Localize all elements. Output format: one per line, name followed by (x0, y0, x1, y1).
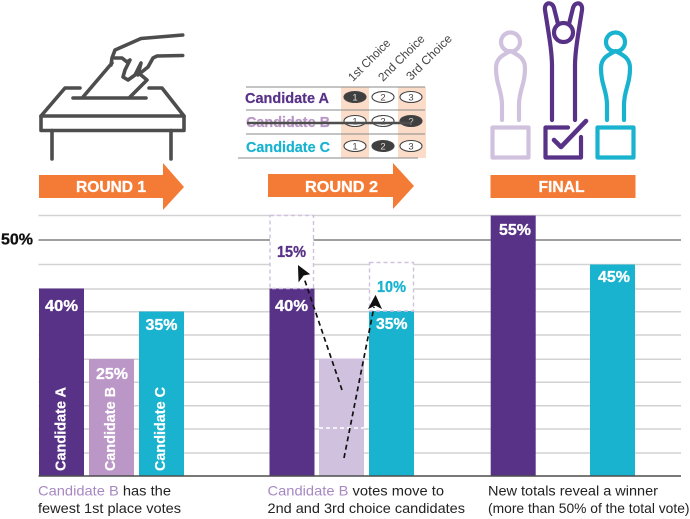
arrow: round 1: ROUND 1 (76, 179, 146, 196)
chart: final bars (491, 216, 635, 476)
ballot table: 1 (352, 116, 358, 128)
chart: round 2 bars: 35% (376, 316, 408, 333)
ballot table: 3 (408, 92, 414, 104)
axis label: 50%: 50% (1, 232, 33, 248)
arrows: vote transfers (298, 266, 381, 458)
banner: final (490, 175, 636, 198)
figure: candidate B (492, 32, 528, 158)
arrow: round 2 (268, 163, 414, 209)
column headings: 1st Choice (345, 36, 394, 84)
caption: round 2 (268, 482, 465, 516)
caption: final: (more than 50% of the total vote) (488, 500, 690, 516)
chart: round 2 bars: 15% (277, 244, 306, 261)
chart: round 2 bars: 40% (275, 298, 308, 315)
caption: round 2: 2nd and 3rd choice candidates (268, 500, 465, 516)
ballot table: 1 (352, 142, 358, 152)
ballot table: 2 (380, 116, 386, 128)
ballot table: 2 (380, 92, 386, 104)
dashed transfer boxes (270, 216, 414, 311)
ballot table: ? (408, 116, 414, 128)
candidate names (245, 90, 330, 156)
caption: final (488, 482, 690, 516)
column headings: 3rd Choice (403, 31, 455, 83)
caption: round 1: fewest 1st place votes (38, 500, 181, 516)
icon: hand casting ballot into box (41, 35, 184, 159)
column headings (345, 31, 455, 84)
candidate names: Candidate B (246, 114, 330, 131)
caption: round 2: Candidate B votes move to (268, 482, 444, 498)
caption: final: New totals reveal a winner (488, 482, 658, 498)
chart: round 2 bars (270, 216, 414, 476)
chart: round 1 bars: Candidate C (152, 387, 169, 471)
arrow: round 2: ROUND 2 (305, 179, 378, 196)
ballot table: 2 (380, 142, 386, 152)
chart: final bars: 55% (499, 222, 531, 239)
chart: round 1 bars: Candidate B (102, 387, 119, 471)
figure: candidate C (598, 32, 634, 158)
ballot table: 1 (352, 92, 358, 104)
ballot table (238, 31, 455, 158)
chart: round 2 bars: 10% (377, 279, 406, 296)
chart: round 1 bars: 35% (146, 317, 178, 334)
chart: round 1 bars: 40% (45, 298, 78, 315)
candidate names: Candidate A (245, 90, 329, 107)
chart: round 1 bars (39, 288, 184, 476)
ballot table: 3 (408, 142, 414, 152)
banner: final: FINAL (538, 179, 585, 196)
ballot ovals (344, 92, 422, 152)
chart: round 1 bars: 25% (96, 366, 128, 383)
column headings: 2nd Choice (375, 32, 428, 84)
caption: round 1: Candidate B has the (38, 482, 171, 498)
caption: round 1 (38, 482, 181, 516)
chart: round 1 bars: Candidate A (52, 387, 70, 471)
arrow: round 1 (39, 163, 184, 210)
figure: winner (545, 3, 586, 157)
icon: three candidates, winner with check (492, 3, 634, 157)
chart: final bars: 45% (598, 269, 630, 286)
candidate names: Candidate C (246, 139, 330, 156)
